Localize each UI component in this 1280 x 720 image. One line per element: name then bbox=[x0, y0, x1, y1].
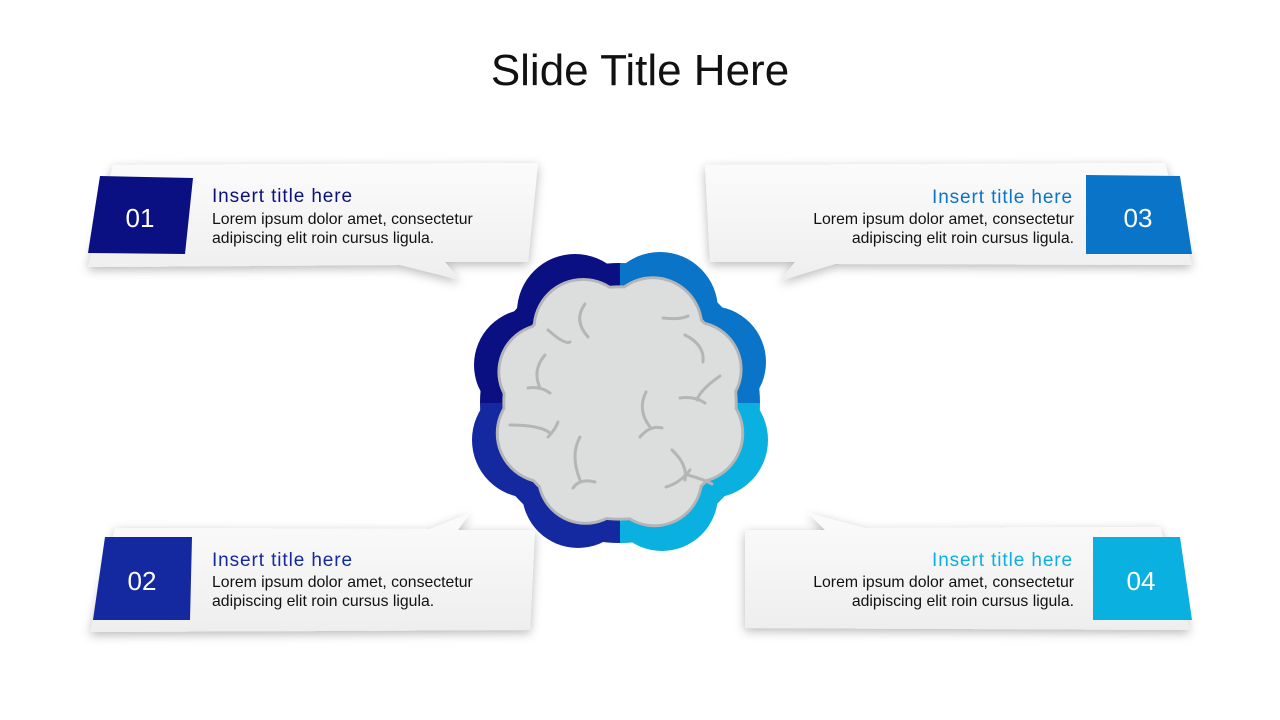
text 01: Lorem ipsum dolor amet, consectetur bbox=[212, 211, 473, 228]
text 02: Lorem ipsum dolor amet, consectetur bbox=[212, 574, 473, 591]
text 02 bbox=[212, 550, 473, 610]
text 04: Lorem ipsum dolor amet, consectetur bbox=[813, 574, 1074, 591]
number badge 02 bbox=[93, 537, 192, 620]
text 02: Insert title here bbox=[212, 550, 353, 571]
text 04: Insert title here bbox=[932, 550, 1073, 571]
text 03: Insert title here bbox=[932, 187, 1073, 208]
number badge 01 bbox=[88, 176, 193, 254]
callout 02 bbox=[90, 513, 535, 632]
number badge 02: 02 bbox=[128, 566, 156, 596]
number badge 03 bbox=[1086, 175, 1192, 254]
number badge 03: 03 bbox=[1124, 203, 1152, 233]
text 01 bbox=[212, 186, 473, 247]
number badge 04 bbox=[1093, 537, 1192, 620]
text 03: Lorem ipsum dolor amet, consectetur bbox=[813, 211, 1074, 228]
text 03 bbox=[813, 187, 1074, 247]
text 01: adipiscing elit roin cursus ligula. bbox=[212, 230, 434, 247]
icon: brain bbox=[472, 252, 768, 551]
text 03: adipiscing elit roin cursus ligula. bbox=[852, 230, 1074, 247]
callout 01 bbox=[88, 163, 538, 280]
text 01: Insert title here bbox=[212, 186, 353, 207]
number badge 01: 01 bbox=[126, 203, 154, 233]
text 04 bbox=[813, 550, 1074, 610]
number badge 04: 04 bbox=[1127, 566, 1155, 596]
text 02: adipiscing elit roin cursus ligula. bbox=[212, 593, 434, 610]
callout 04 bbox=[745, 513, 1192, 630]
text 04: adipiscing elit roin cursus ligula. bbox=[852, 593, 1074, 610]
callout 03 bbox=[705, 163, 1192, 281]
title: Slide Title Here bbox=[491, 46, 789, 95]
